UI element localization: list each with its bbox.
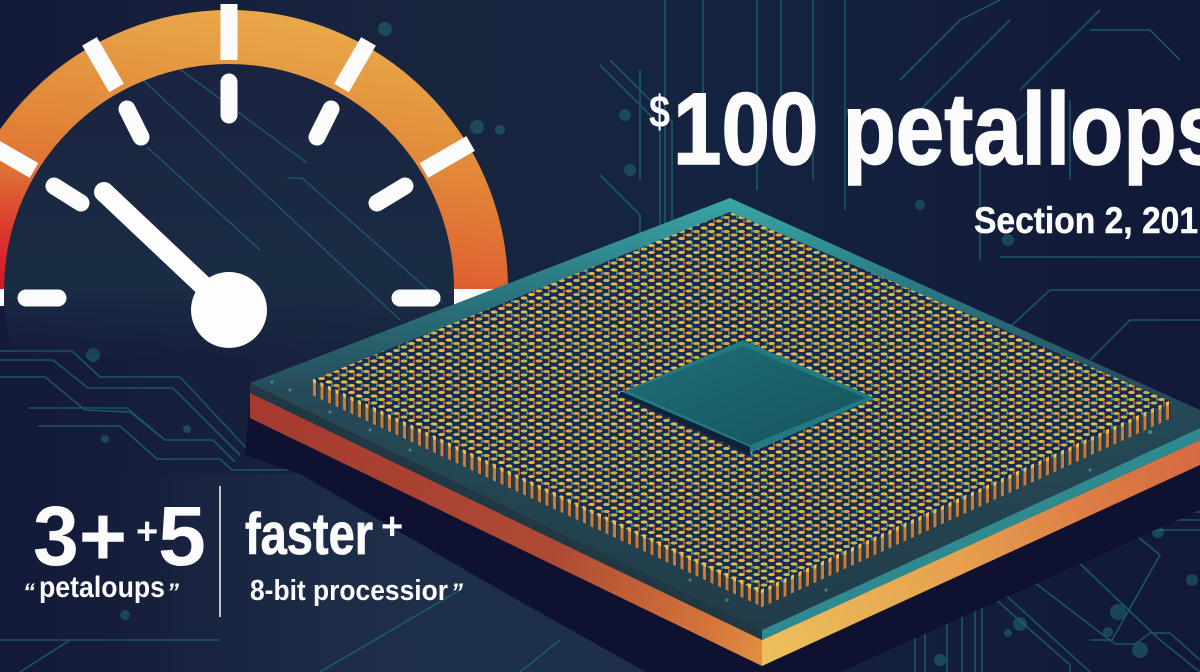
stat number 3+: 3+	[33, 489, 127, 583]
chip right side face	[762, 440, 1200, 666]
gauge needle	[104, 192, 229, 310]
gauge dial traces	[143, 67, 443, 320]
chip top surface	[250, 198, 1200, 630]
front-right pin row	[760, 400, 1172, 608]
die top	[628, 346, 866, 445]
stat faster plus: +	[381, 506, 403, 548]
chip pin array	[300, 205, 1180, 608]
stat number 5: 5	[158, 489, 206, 583]
stat label closing quote: ”	[167, 579, 179, 606]
divider	[219, 486, 221, 617]
chip shadow	[245, 400, 1200, 672]
stat label 8-bit processor: 8-bit processior	[250, 575, 448, 607]
central die	[620, 340, 875, 455]
processor chip	[250, 198, 1200, 666]
stat label petaloups: petaloups	[39, 571, 165, 604]
gauge tick marks	[26, 82, 432, 298]
stat label closing quote: ”	[451, 579, 463, 606]
gauge hub	[191, 272, 267, 348]
die base	[620, 340, 875, 453]
front-left pin row	[312, 378, 762, 607]
gauge arc dividers	[0, 4, 500, 298]
stat word faster: faster	[245, 502, 373, 567]
chip left dark edge	[250, 383, 762, 640]
die shadow edge	[620, 391, 750, 455]
chip right teal edge	[762, 428, 1200, 640]
gauge dial face	[3, 57, 455, 509]
speedometer gauge	[0, 4, 500, 509]
chip surface markings	[270, 380, 1152, 602]
gauge orange arc	[0, 37, 481, 289]
stat small plus: +	[136, 511, 158, 553]
title dollar sign: $	[649, 86, 670, 137]
lower background panel	[0, 474, 646, 672]
pin grid	[300, 205, 1180, 605]
title	[649, 72, 1200, 186]
stat: faster 8-bit processor	[245, 502, 463, 607]
stat: 3+ +5 petaloups	[23, 489, 206, 606]
gauge red arc overlay	[0, 148, 20, 289]
chip left side face	[250, 383, 762, 666]
stat label opening quote: “	[23, 579, 35, 606]
